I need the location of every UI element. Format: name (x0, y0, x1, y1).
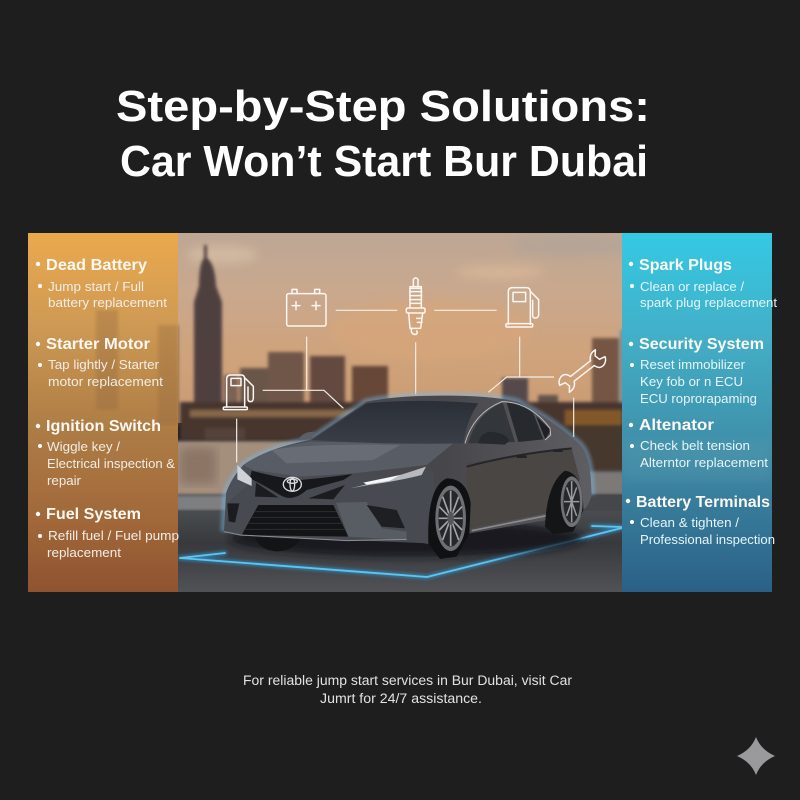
item: starter motor (36, 336, 164, 389)
item: starter motor: Tap lightly / Starter (48, 358, 159, 372)
icon: fuel pump left (223, 375, 253, 410)
item: dead battery (36, 257, 168, 310)
item: alternator: Check belt tension (640, 439, 750, 453)
front fascia (224, 470, 435, 543)
item: ignition switch: Wiggle key / (47, 440, 121, 454)
side windows (465, 402, 551, 443)
mirrors (478, 432, 509, 445)
panel: photo background with skyline (178, 233, 622, 592)
icon: wrench (556, 348, 609, 394)
item: dead battery: battery replacement (48, 296, 168, 310)
item: ignition switch (36, 418, 176, 488)
item: ignition switch: Ignition Switch (46, 418, 161, 435)
item: security system: ECU roprorapaming (640, 392, 757, 406)
item: security system: Key fob or n ECU (640, 375, 743, 389)
item: battery terminals: Professional inspection (640, 533, 775, 547)
hood highlight (243, 442, 453, 477)
title: Car Won’t Start Bur Dubai (120, 137, 648, 186)
icon: fuel pump (506, 288, 539, 327)
item: fuel system: replacement (47, 546, 122, 560)
item: fuel system: Fuel System (46, 506, 141, 523)
connector lines (237, 310, 574, 462)
item: security system: Reset immobilizer (640, 358, 745, 372)
icons and connector lines (223, 278, 609, 462)
item: battery terminals: Clean & tighten / (640, 516, 740, 530)
footer text: Jumrt for 24/7 assistance. (320, 691, 482, 706)
title (116, 82, 650, 186)
item: starter motor: Starter Motor (46, 336, 150, 353)
footer text: For reliable jump start services in Bur Dubai, visit Car (243, 673, 573, 688)
item: spark plugs: Spark Plugs (639, 257, 732, 274)
item: fuel system: Refill fuel / Fuel pump (48, 529, 179, 543)
car glow (224, 396, 592, 532)
front left tire (255, 537, 300, 551)
item: starter motor: motor replacement (48, 375, 164, 389)
icon: sparkle watermark (737, 737, 775, 775)
item: fuel system (36, 506, 179, 560)
lower grille (242, 505, 348, 537)
floor glow lines (180, 526, 622, 577)
item: security system (629, 336, 764, 406)
panel: left causes (28, 233, 179, 592)
item: spark plugs: spark plug replacement (640, 296, 778, 310)
icon: spark plug (406, 278, 425, 334)
panel: right causes (622, 233, 778, 592)
item: ignition switch: Electrical inspection & (47, 457, 176, 471)
item: spark plugs: Clean or replace / (640, 280, 745, 294)
spire tower (194, 245, 222, 412)
grille upper (250, 471, 353, 498)
car (224, 396, 592, 559)
side shading (467, 448, 580, 528)
car shadow (230, 520, 583, 557)
body (224, 396, 592, 545)
icon: battery (287, 289, 326, 326)
item: battery terminals: Battery Terminals (636, 494, 770, 511)
item: alternator (629, 417, 769, 470)
windshield (312, 401, 478, 444)
item: alternator: Alterntor replacement (640, 456, 769, 470)
front wheel (428, 478, 471, 559)
toyota logo (283, 477, 301, 491)
item: spark plugs (629, 257, 778, 310)
rear wheel (545, 471, 583, 534)
item: battery terminals (626, 494, 775, 547)
title: Step-by-Step Solutions: (116, 82, 650, 131)
headlights (350, 467, 426, 488)
item: dead battery: Dead Battery (46, 257, 147, 274)
item: alternator: Altenator (639, 417, 714, 434)
item: ignition switch: repair (47, 474, 81, 488)
footer text (243, 673, 573, 706)
item: dead battery: Jump start / Full (48, 280, 144, 294)
item: security system: Security System (639, 336, 764, 353)
